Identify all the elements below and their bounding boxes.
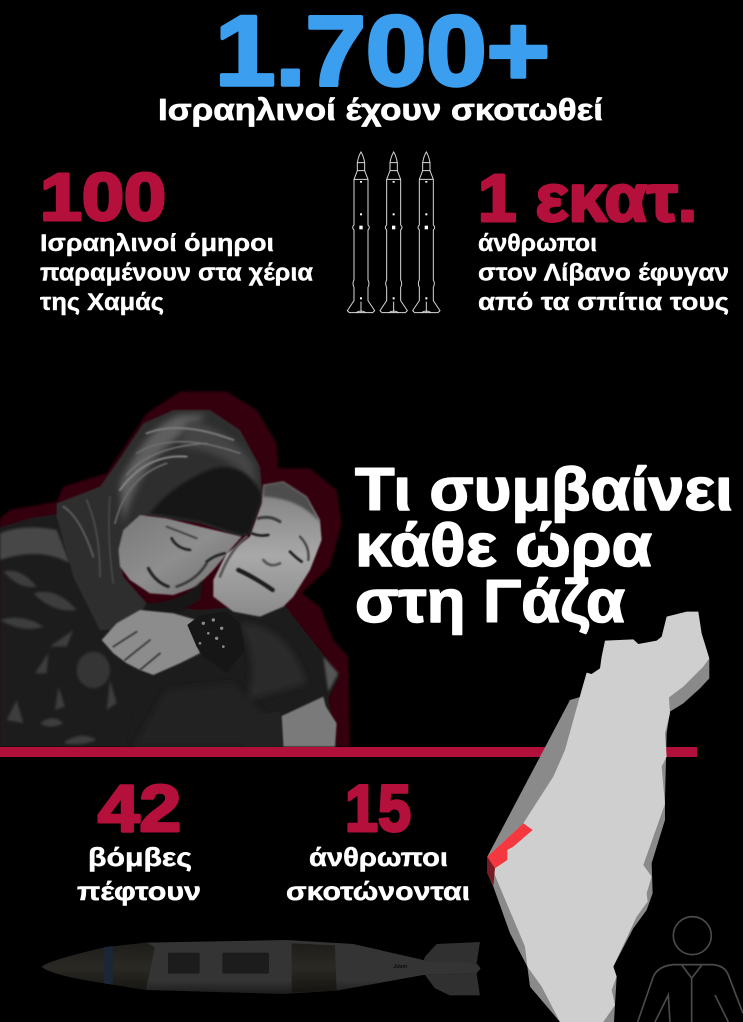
- bomb panels: [168, 953, 200, 974]
- killed text: [286, 842, 470, 906]
- bomb body: [42, 940, 481, 994]
- killed text: άνθρωποι: [309, 842, 448, 872]
- map: [487, 612, 709, 1022]
- displaced text: από τα σπίτια τους: [478, 289, 729, 316]
- inner dark scarf: [150, 467, 262, 535]
- displaced text: άνθρωποι: [478, 230, 597, 257]
- lace cuff: [187, 612, 245, 673]
- Gaza strip: [487, 823, 533, 868]
- title: Τι συμβαίνει: [355, 456, 733, 523]
- icon: three rockets: [347, 152, 440, 313]
- stat: hostages: [40, 160, 313, 316]
- bombs number: 42: [98, 771, 181, 845]
- mother's features: [148, 527, 225, 587]
- headline caption: Ισραηλινοί έχουν σκοτωθεί: [158, 92, 603, 127]
- bomb marking: Jdam: [393, 964, 407, 970]
- child's head: [213, 482, 322, 617]
- hostages number: 100: [40, 160, 166, 235]
- displaced text: [478, 230, 729, 316]
- displaced text: στον Λίβανο έφυγαν: [478, 260, 729, 286]
- body and dress: [0, 514, 339, 747]
- map land: [487, 612, 709, 1022]
- killed number: 15: [345, 771, 411, 845]
- Gaza shadow: [487, 857, 495, 886]
- child's lower hand: [282, 697, 337, 747]
- neck shadow under mother's chin: [143, 580, 203, 613]
- child's features: [220, 517, 309, 590]
- stat: displaced in Lebanon: [478, 161, 729, 316]
- displaced number: 1 εκατ.: [478, 161, 697, 236]
- bombs text: [77, 842, 201, 906]
- dress floral pattern: [0, 527, 117, 744]
- headscarf: [57, 410, 262, 630]
- maroon halo: [0, 392, 350, 747]
- hostages text: παραμένουν στα χέρια: [40, 260, 313, 286]
- map shadow: [487, 658, 709, 1022]
- stat: killed: [286, 771, 470, 906]
- photo: mother embracing crying child: [0, 392, 350, 747]
- hostages text: [40, 230, 313, 316]
- killed text: σκοτώνονται: [286, 876, 470, 906]
- title: κάθε ώρα: [355, 512, 652, 579]
- mother's hand: [102, 610, 200, 675]
- bombs text: πέφτουν: [77, 876, 201, 906]
- red divider line: [0, 747, 697, 757]
- icon: person outline: [638, 917, 743, 1022]
- hostages text: της Χαμάς: [40, 289, 164, 316]
- title: [355, 456, 733, 635]
- mother's face: [118, 515, 242, 595]
- bombs text: βόμβες: [88, 842, 192, 872]
- hostages text: Ισραηλινοί όμηροι: [40, 230, 274, 257]
- child's dark clothing: [127, 603, 338, 747]
- bomb tail fins: [423, 942, 480, 995]
- icon: bomb: [42, 940, 481, 995]
- stat: bombs: [77, 771, 201, 906]
- headscarf folds: [63, 428, 240, 583]
- title: στη Γάζα: [355, 568, 625, 635]
- bomb dark bands: [42, 943, 337, 993]
- headscarf sheen: [120, 415, 207, 523]
